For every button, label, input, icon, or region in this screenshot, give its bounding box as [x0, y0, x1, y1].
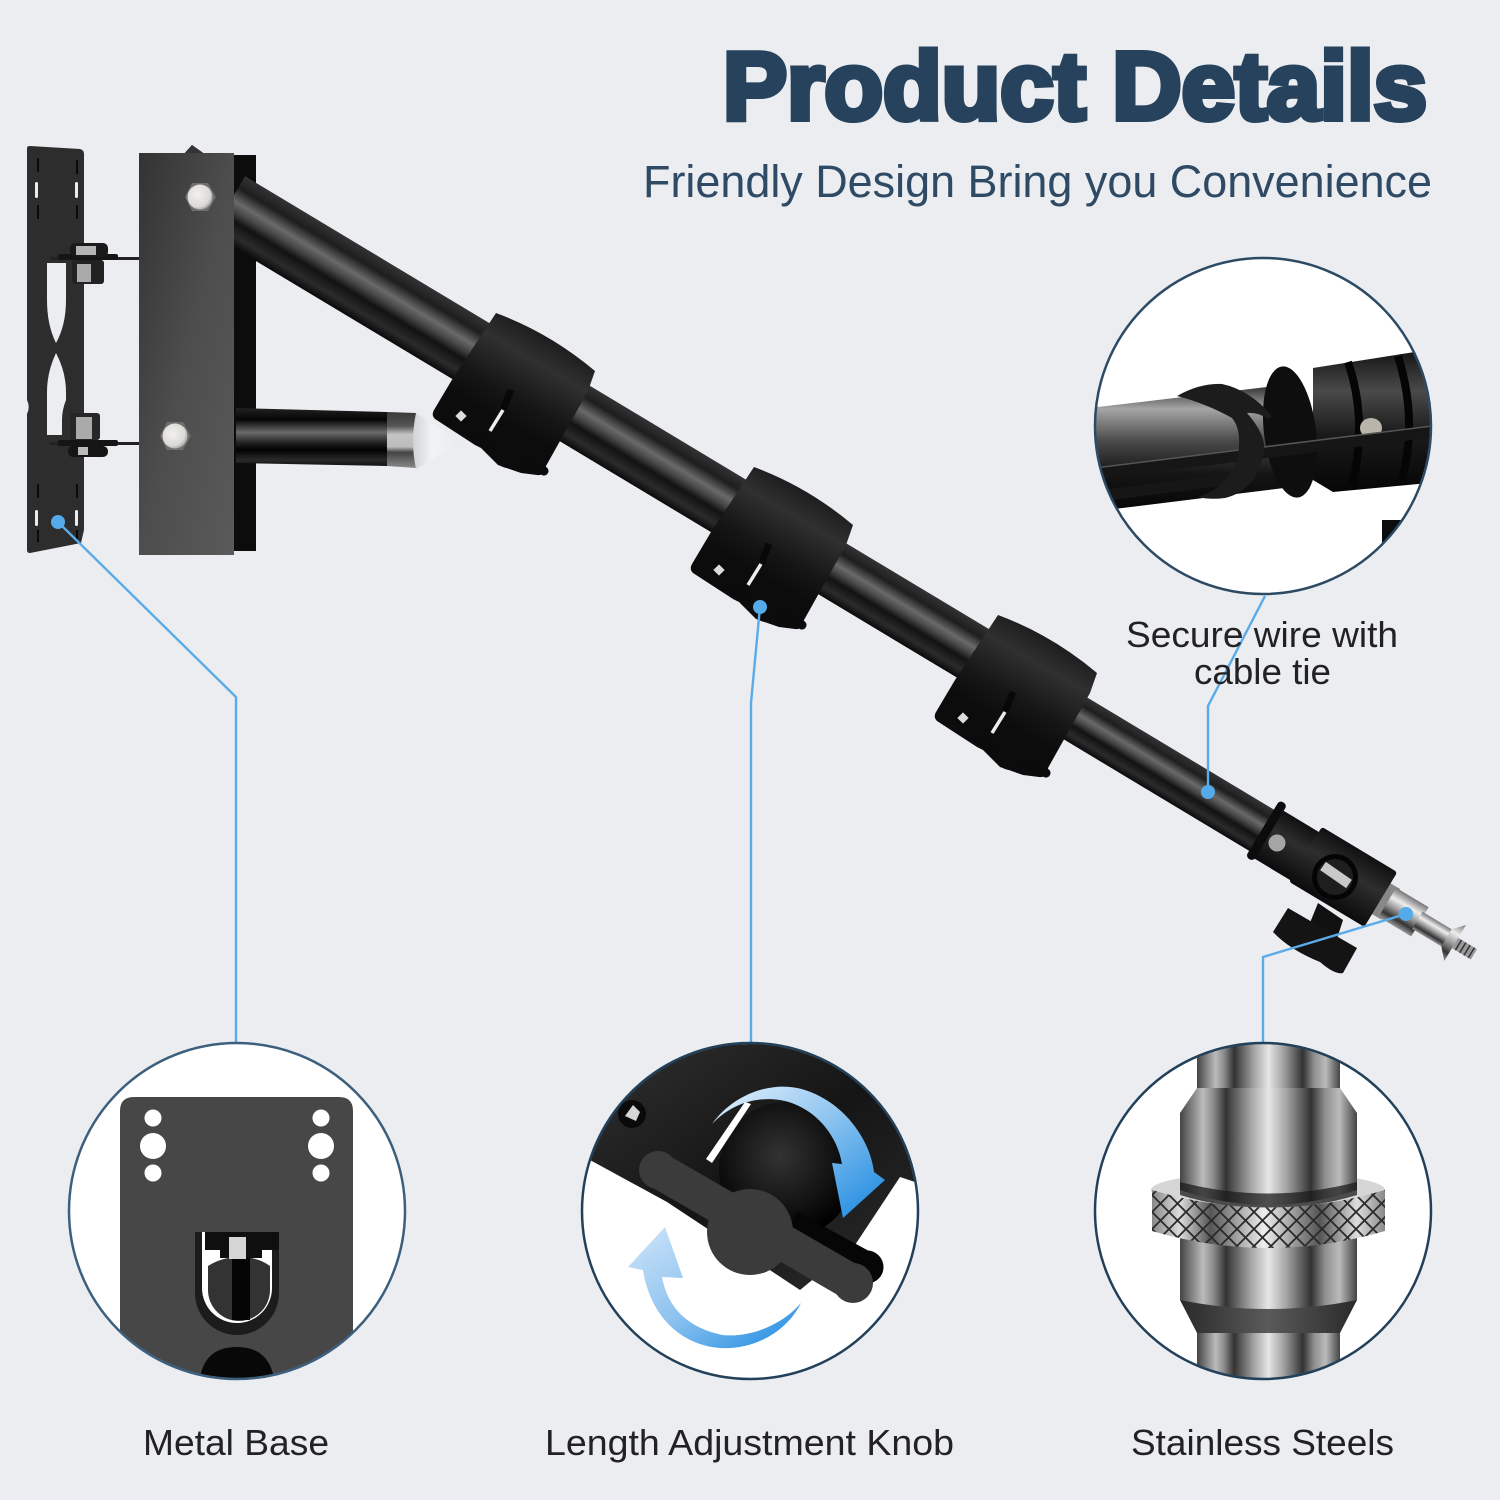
- lower metal body: [1180, 1238, 1357, 1309]
- upper stem: [1197, 1044, 1340, 1088]
- circle outline: [582, 1043, 918, 1379]
- lower flare: [1180, 1300, 1357, 1333]
- spigot: [1368, 879, 1485, 972]
- screw head: [1360, 418, 1382, 434]
- text: secure wire: [1126, 614, 1398, 692]
- circle outline: [69, 1043, 405, 1379]
- clamp 2: [691, 467, 853, 629]
- wall mounting back plate: [27, 146, 84, 553]
- text: secure wire: cable tie: [1194, 651, 1331, 692]
- connector hole: [1312, 854, 1358, 900]
- detail circle: adjustment knob: [570, 1040, 930, 1379]
- bolt top: [185, 183, 216, 211]
- screw: [618, 1100, 646, 1128]
- corner fragment: [1382, 520, 1401, 543]
- text: secure wire: Secure wire with: [1126, 614, 1398, 655]
- telescopic pole sections: [211, 176, 1291, 862]
- label: metal base: Metal Base: [143, 1422, 329, 1463]
- connector body: [1254, 810, 1321, 881]
- connector block: [1289, 827, 1397, 927]
- steel ball: [1268, 834, 1286, 852]
- pole in detail: [1096, 387, 1282, 508]
- t-knob under connector: [1273, 903, 1357, 973]
- slot: [195, 1232, 279, 1335]
- subtitle: Friendly Design Bring you Convenience: [643, 156, 1432, 207]
- knurled ring side: [1152, 1190, 1385, 1248]
- bolt bottom: [160, 422, 191, 450]
- shadow beneath body: [1180, 1182, 1357, 1208]
- knurl pattern: [1152, 1190, 1385, 1248]
- detail circle: cable tie: [1090, 258, 1440, 594]
- upper flare: [1180, 1088, 1357, 1125]
- main mounting plate: [139, 153, 234, 555]
- clamp 3: [935, 615, 1097, 777]
- end connector and spigot: [1246, 800, 1490, 983]
- rear plate strip: [183, 145, 256, 551]
- clamp body: [591, 1044, 914, 1290]
- detail circle: metal base: [69, 1043, 405, 1400]
- leader line: cable tie: [1201, 596, 1265, 799]
- leader line: stainless steels: [1263, 907, 1413, 1044]
- cables: [1095, 431, 1440, 496]
- lower stem: [1197, 1333, 1340, 1378]
- tube visible through slot: [208, 1257, 270, 1321]
- lower strut: [236, 408, 461, 469]
- knob handle: [639, 1151, 873, 1303]
- upper bracket and nut: [50, 243, 140, 284]
- arrow: clockwise: [712, 1087, 885, 1218]
- label: length adjustment knob: Length Adjustment Knob: [545, 1422, 954, 1463]
- clamp 1: [433, 313, 595, 475]
- retaining ring: [1246, 800, 1287, 861]
- label: stainless steels: Stainless Steels: [1131, 1422, 1394, 1463]
- dome: [719, 1102, 842, 1226]
- circle outline: [1095, 1043, 1431, 1379]
- plate with holes: [120, 1097, 353, 1400]
- title: Product Details: [723, 33, 1427, 140]
- flange ring: [1263, 366, 1316, 498]
- knob handle shadow: [790, 1225, 883, 1283]
- threaded body in detail: [1313, 352, 1430, 492]
- velcro cable tie: [1177, 384, 1272, 499]
- arrow: counter-clockwise: [628, 1227, 801, 1348]
- body grooves: [1348, 356, 1409, 486]
- product: wall mount arm: [27, 145, 1490, 983]
- upper metal body: [1180, 1122, 1357, 1205]
- circle outline: [1095, 258, 1431, 594]
- nut in slot: [205, 1232, 279, 1258]
- lower arc: [200, 1347, 274, 1378]
- lower bracket and nut: [50, 413, 140, 457]
- leader line: adjustment knob: [751, 600, 767, 1044]
- leader line: metal base: [51, 515, 236, 1044]
- detail circle: stainless steel: [1095, 1040, 1431, 1393]
- slit: [706, 1102, 751, 1163]
- knurled ring top: [1151, 1178, 1385, 1207]
